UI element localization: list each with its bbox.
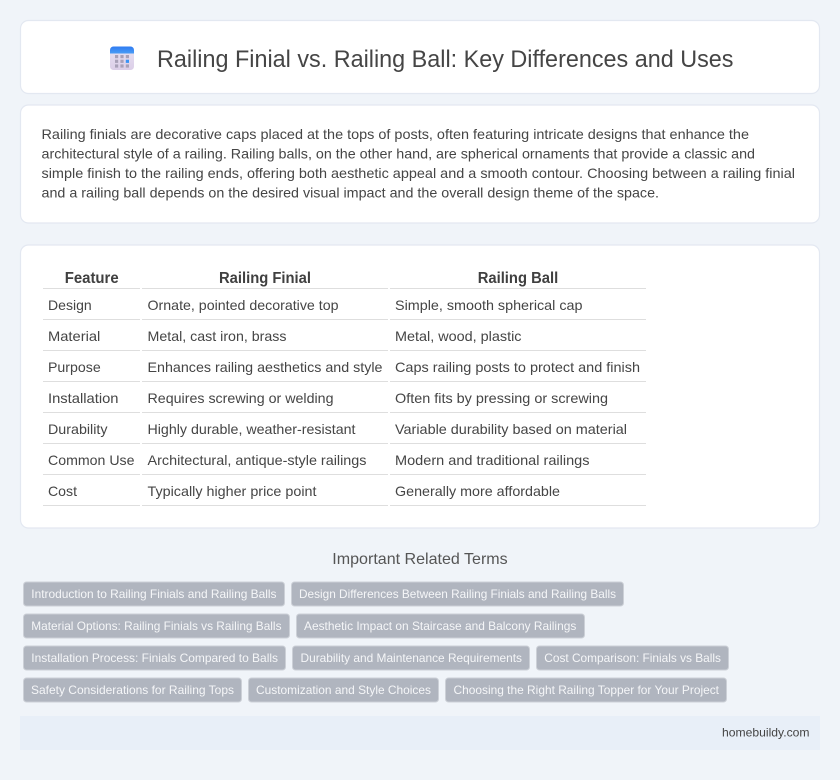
panel: related term tags — [24, 582, 728, 702]
tag: material options: Material Options: Railing Finials vs Railing Balls — [31, 619, 281, 633]
table row: material: Material — [48, 328, 100, 344]
tag: aesthetic impact: Aesthetic Impact on Staircase and Balcony Railings — [304, 619, 576, 633]
footer source text: homebuildy.com — [722, 726, 810, 740]
table row: design: Design — [48, 297, 92, 313]
text block: introduction paragraph: architectural style of a railing. Railing balls, on the other hand, are spherical ornaments that provide a classic and — [42, 146, 755, 162]
table row: purpose: Enhances railing aesthetics and style — [148, 359, 383, 375]
icon: calendar — [110, 46, 134, 70]
tag: cost comparison — [536, 646, 728, 670]
table header: Railing Finial — [219, 270, 311, 287]
table row: durability: Highly durable, weather-resistant — [148, 421, 356, 437]
table header: Feature — [65, 270, 119, 287]
tag: durability: Durability and Maintenance Requirements — [300, 651, 522, 665]
table row: cost — [43, 483, 646, 506]
table row: cost: Generally more affordable — [395, 483, 560, 499]
panel: introduction — [20, 105, 820, 223]
title: Railing Finial vs. Railing Ball: Key Differences and Uses — [157, 46, 734, 73]
table row: purpose: Caps railing posts to protect and finish — [395, 359, 640, 375]
panel: comparison table — [20, 245, 820, 528]
text block: introduction paragraph: and a railing ball depends on the desired visual impact and the overall design theme of the space. — [42, 184, 659, 200]
table header — [43, 270, 646, 289]
tag: durability — [292, 646, 530, 670]
text block: introduction paragraph — [42, 126, 795, 200]
table row: installation: Requires screwing or welding — [148, 390, 334, 406]
table row: purpose — [43, 359, 646, 382]
table row: common use: Architectural, antique-style railings — [148, 452, 366, 468]
table row: material: Metal, wood, plastic — [395, 328, 522, 344]
tag: material options — [24, 614, 290, 638]
table row: cost: Cost — [48, 483, 77, 499]
table row: durability — [43, 421, 646, 444]
table row: installation: Often fits by pressing or screwing — [395, 390, 608, 406]
table row: material — [43, 328, 646, 351]
tag: choosing — [446, 678, 726, 702]
table row: durability: Variable durability based on material — [395, 421, 627, 437]
table row: design — [43, 297, 646, 320]
table row: installation: Installation — [48, 390, 118, 406]
tag: design differences: Design Differences Between Railing Finials and Railing Balls — [299, 587, 616, 601]
tag: installation process — [24, 646, 286, 670]
tag: cost comparison: Cost Comparison: Finials vs Balls — [544, 651, 721, 665]
table row: common use: Common Use — [48, 452, 135, 468]
tag: aesthetic impact — [296, 614, 584, 638]
tag: introduction — [24, 582, 284, 606]
tag: choosing: Choosing the Right Railing Topper for Your Project — [454, 683, 720, 697]
table row: cost: Typically higher price point — [148, 483, 317, 499]
tag: safety — [24, 678, 242, 702]
table row: installation — [43, 390, 646, 413]
table row: purpose: Purpose — [48, 359, 101, 375]
table header: Railing Ball — [478, 270, 558, 287]
tag: installation process: Installation Process: Finials Compared to Balls — [31, 651, 278, 665]
tag: design differences — [292, 582, 624, 606]
tag: safety: Safety Considerations for Railing Tops — [31, 683, 234, 697]
text block: introduction paragraph: simple finish to the railing ends, offering both aesthetic appeal and a smooth contour. Choosing between a railing finial — [42, 165, 795, 181]
heading: related terms: Important Related Terms — [332, 551, 508, 568]
table row: common use — [43, 452, 646, 475]
tag: customization: Customization and Style Choices — [256, 683, 431, 697]
panel: header — [20, 20, 820, 94]
footer — [20, 716, 820, 750]
table row: design: Ornate, pointed decorative top — [148, 297, 339, 313]
table row: durability: Durability — [48, 421, 108, 437]
table row: common use: Modern and traditional railings — [395, 452, 590, 468]
table row: design: Simple, smooth spherical cap — [395, 297, 583, 313]
tag: introduction: Introduction to Railing Finials and Railing Balls — [31, 587, 276, 601]
table row: material: Metal, cast iron, brass — [148, 328, 286, 344]
text block: introduction paragraph: Railing finials are decorative caps placed at the tops of posts, often featuring intricate designs that enhance the — [42, 126, 749, 142]
tag: customization — [248, 678, 438, 702]
